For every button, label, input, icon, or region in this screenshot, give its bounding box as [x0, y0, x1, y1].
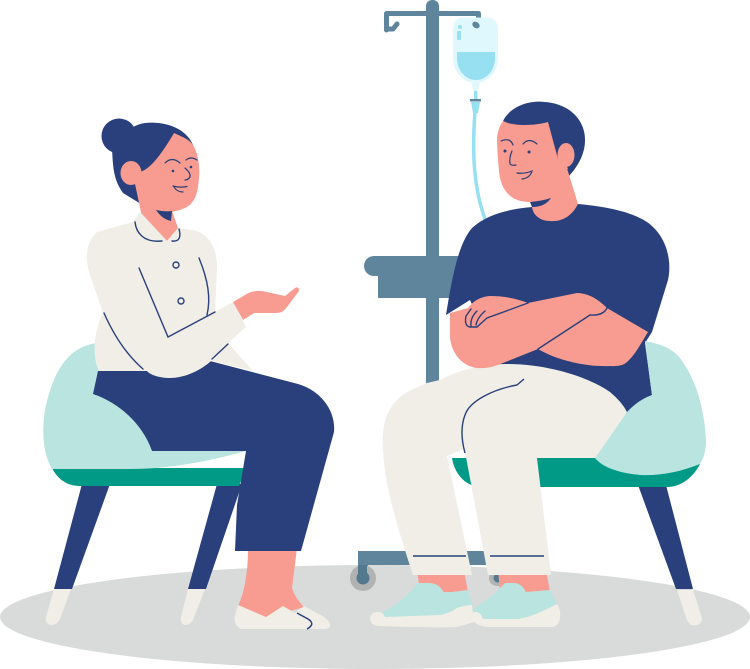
front leg tip [181, 589, 205, 625]
nurse facial features [165, 158, 197, 192]
right chair [452, 458, 702, 626]
hanger arm [386, 14, 478, 30]
nurse lower leg [238, 548, 304, 618]
patient trousers back leg [383, 364, 530, 575]
nurse shoe [235, 605, 330, 629]
liquid [457, 52, 495, 80]
patient ankles [417, 570, 550, 592]
base bar [358, 551, 492, 572]
patient cushion [595, 341, 706, 475]
blouse details [104, 222, 228, 369]
patient crossed arms [450, 293, 648, 368]
patient [370, 102, 706, 627]
patient shirt [446, 204, 669, 414]
trouser details [413, 379, 544, 556]
cushion [43, 343, 246, 469]
tube [474, 112, 487, 224]
hair back [112, 123, 193, 204]
left caster [350, 565, 376, 591]
right caster [489, 570, 505, 586]
nurse neck [141, 195, 178, 241]
neck shadow [156, 210, 172, 221]
patient neck [530, 165, 578, 221]
patient face [497, 121, 568, 202]
patient front shoe [470, 583, 560, 627]
seat base [452, 458, 700, 487]
nurse blouse [87, 212, 246, 378]
patient facial features [501, 140, 537, 179]
leg [638, 485, 693, 589]
tray [364, 256, 470, 298]
leg tip [677, 590, 702, 626]
bag marks [457, 25, 462, 40]
left chair [43, 343, 246, 625]
back leg tip [46, 589, 71, 625]
nurse hand [233, 287, 299, 320]
front leg [188, 484, 242, 589]
nurse trousers [93, 361, 334, 551]
patient trousers front leg [440, 364, 627, 575]
hair bun [102, 118, 136, 154]
IV bag and tube [453, 18, 498, 224]
nurse [87, 118, 334, 629]
chin shadow [530, 198, 551, 207]
nurse face [135, 133, 199, 212]
arm outlines and fingers [466, 303, 607, 349]
nurse ear [120, 161, 142, 185]
patient back shoe [370, 583, 474, 627]
patient ear [558, 143, 574, 167]
IV stand [350, 0, 505, 591]
pole [426, 0, 439, 400]
bag port [471, 20, 481, 30]
seat base [52, 468, 246, 486]
bag [453, 18, 498, 83]
patient hair [503, 102, 585, 178]
floor ellipse [0, 565, 750, 669]
bag neck and drip chamber [471, 83, 480, 99]
tube clamp [470, 99, 481, 102]
nurse hem panel [212, 343, 253, 371]
back leg [54, 484, 110, 589]
